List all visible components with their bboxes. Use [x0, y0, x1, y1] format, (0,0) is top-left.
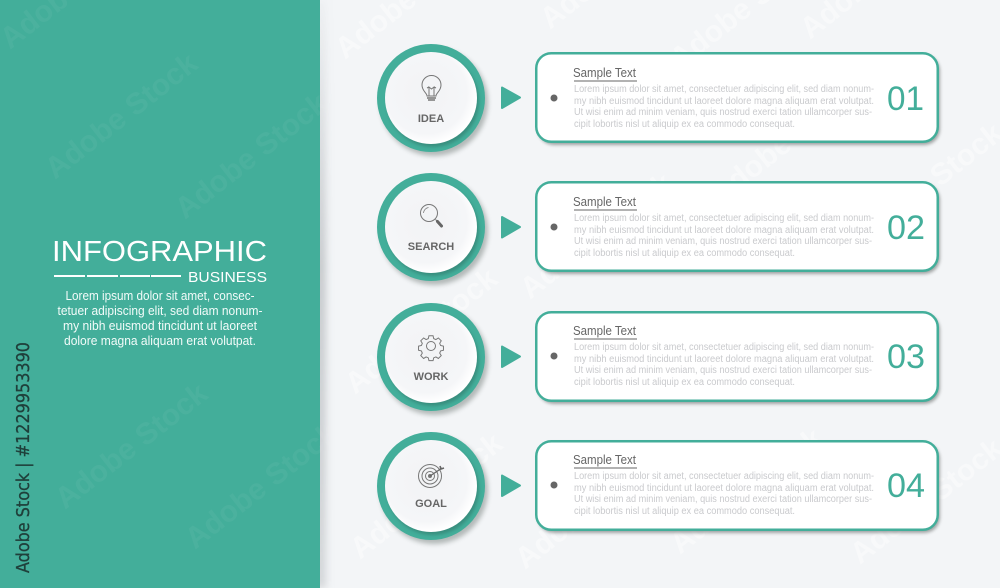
card: my nibh euismod tincidunt ut laoreet dolore magna aliquam erat volutpat. [574, 96, 874, 107]
label: IDEA [418, 113, 444, 125]
row 3: work [377, 303, 940, 415]
card: Ut wisi enim ad minim veniam, quis nostrud exerci tation ullamcorper sus- [574, 107, 872, 118]
card: Lorem ipsum dolor sit amet, consectetuer adipiscing elit, sed diam nonum- [574, 471, 874, 482]
card: my nibh euismod tincidunt ut laoreet dolore magna aliquam erat volutpat. [574, 354, 874, 365]
icon: target [418, 464, 444, 488]
card: Lorem ipsum dolor sit amet, consectetuer adipiscing elit, sed diam nonum- [574, 213, 874, 224]
circle badge [377, 44, 488, 156]
icon: magnifier [420, 204, 442, 226]
card: Sample Text [573, 324, 636, 338]
card [536, 312, 940, 404]
card: Ut wisi enim ad minim veniam, quis nostrud exerci tation ullamcorper sus- [574, 494, 872, 505]
watermarks: Adobe Stock [704, 71, 869, 211]
left panel: Adobe Stock [39, 46, 204, 186]
card: 01 [887, 80, 924, 118]
left panel: Adobe Stock [169, 86, 334, 226]
card [536, 182, 940, 274]
card: 02 [887, 209, 925, 247]
watermarks: Adobe Stock [344, 426, 509, 566]
card: Lorem ipsum dolor sit amet, consectetuer adipiscing elit, sed diam nonum- [574, 342, 874, 353]
title: INFOGRAPHIC [52, 236, 267, 268]
watermarks: Adobe Stock [509, 436, 674, 576]
card: cipit lobortis nisl ut aliquip ex ea commodo consequat. [574, 119, 795, 130]
card: my nibh euismod tincidunt ut laoreet dolore magna aliquam erat volutpat. [574, 225, 874, 236]
card: 04 [887, 467, 925, 505]
watermarks: Adobe Stock [664, 421, 829, 561]
heading block [52, 236, 267, 348]
left panel: Adobe Stock [49, 376, 214, 516]
circle badge [377, 303, 488, 415]
card: Ut wisi enim ad minim veniam, quis nostrud exerci tation ullamcorper sus- [574, 236, 872, 247]
row 4: goal [377, 432, 940, 544]
row 2: search [377, 173, 940, 285]
arrow [502, 476, 520, 496]
left panel shadow [314, 0, 326, 588]
arrow [502, 88, 520, 108]
circle badge [377, 173, 488, 285]
card [536, 53, 940, 145]
card: cipit lobortis nisl ut aliquip ex ea commodo consequat. [574, 506, 795, 517]
description: my nibh euismod tincidunt ut laoreet [63, 319, 257, 333]
card: my nibh euismod tincidunt ut laoreet dolore magna aliquam erat volutpat. [574, 483, 874, 494]
card [536, 441, 940, 533]
card: cipit lobortis nisl ut aliquip ex ea commodo consequat. [574, 377, 795, 388]
icon: gear [419, 336, 443, 361]
circle badge [377, 432, 488, 544]
description [58, 289, 262, 348]
label: SEARCH [408, 241, 454, 253]
left panel: Adobe Stock [179, 416, 344, 556]
heading rule [54, 275, 181, 277]
arrow [502, 346, 520, 367]
row 1: idea [377, 44, 940, 156]
watermarks: Adobe Stock [514, 166, 679, 306]
arrow [502, 217, 520, 238]
card: Sample Text [573, 66, 636, 80]
left panel [0, 0, 344, 588]
label: WORK [414, 371, 448, 383]
card: Sample Text [573, 453, 636, 467]
watermarks: Adobe Stock [339, 261, 504, 401]
description: dolore magna aliquam erat volutpat. [64, 334, 256, 348]
icon: light bulb [422, 76, 441, 100]
card: Sample Text [573, 195, 636, 209]
card: Lorem ipsum dolor sit amet, consectetuer adipiscing elit, sed diam nonum- [574, 84, 874, 95]
label: GOAL [415, 498, 447, 510]
subtitle: BUSINESS [188, 269, 267, 286]
description: tetuer adipiscing elit, sed diam nonum- [58, 304, 262, 318]
stock id: Adobe Stock | #1229953390 [14, 342, 34, 573]
watermarks [329, 0, 1000, 576]
card: 03 [887, 338, 925, 376]
description: Lorem ipsum dolor sit amet, consec- [66, 289, 254, 303]
card: cipit lobortis nisl ut aliquip ex ea commodo consequat. [574, 248, 795, 259]
card: Ut wisi enim ad minim veniam, quis nostrud exerci tation ullamcorper sus- [574, 365, 872, 376]
